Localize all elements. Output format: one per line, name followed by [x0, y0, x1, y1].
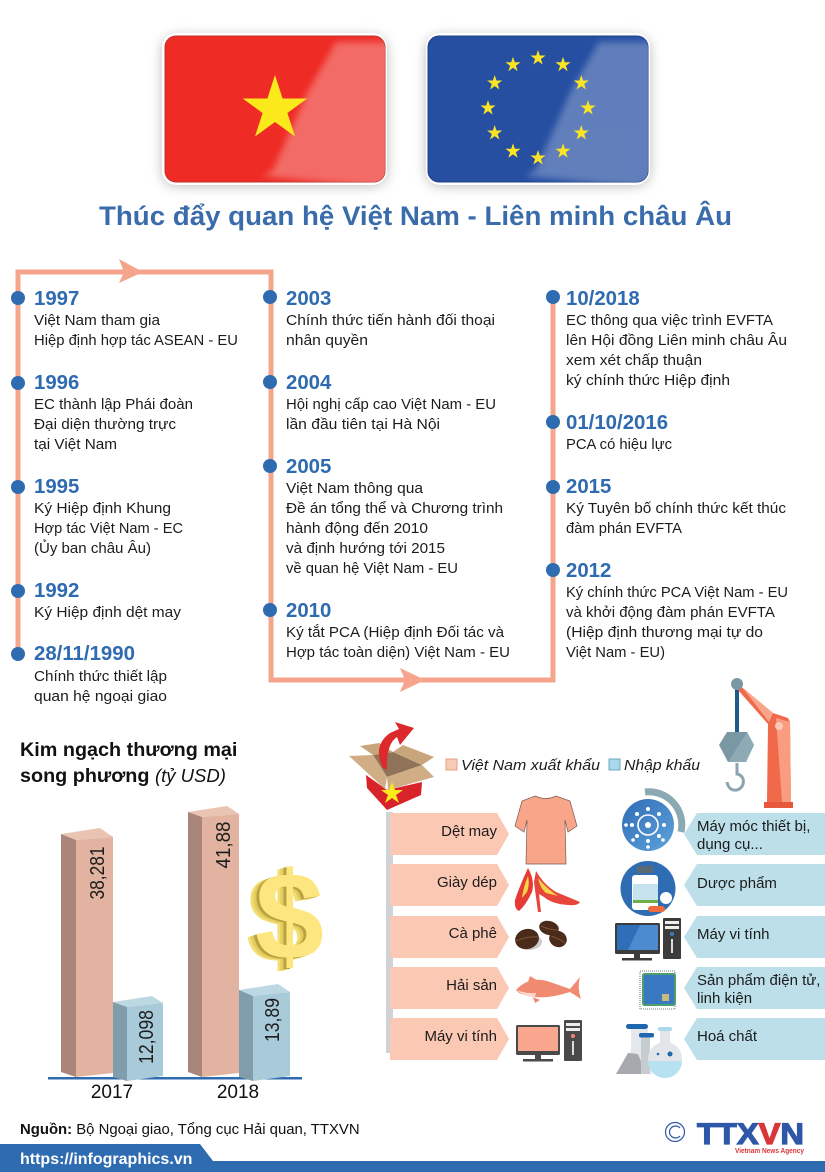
event: 28/11/1990: [34, 643, 167, 705]
icon: computer (imports): [615, 918, 681, 960]
exports: Cà phê: [390, 916, 509, 958]
event: 2010: 2010: [286, 600, 331, 622]
event: 2005: Việt Nam thông qua: [286, 480, 424, 497]
event: 1997: Hiệp định hợp tác ASEAN - EU: [34, 332, 238, 349]
event: 2012: [566, 560, 788, 661]
imports: Máy vi tính: Máy vi tính: [697, 926, 770, 943]
axis: [48, 1077, 302, 1080]
imports: Dược phẩm: [684, 864, 825, 906]
event: 2012: Việt Nam - EU): [566, 644, 665, 661]
icon: dollar sign: $: [246, 851, 315, 989]
bar: 2018 exports: 41,88: [213, 822, 235, 868]
year label 2017: 2017: [91, 1082, 133, 1103]
icon: high heels: [515, 868, 580, 912]
exports: Dệt may: Dệt may: [441, 823, 497, 840]
logo: TTXVN: TTXVN: [697, 1118, 804, 1151]
icon: chemistry flasks: [616, 1024, 682, 1078]
legend: Việt Nam xuất khẩu: [461, 757, 601, 774]
chart heading: song phương (tỷ USD): [20, 765, 226, 787]
event: 2004: Hội nghị cấp cao Việt Nam - EU: [286, 396, 496, 413]
bar: 2017 exports: 38,281: [87, 846, 109, 900]
exports: Máy vi tính: Máy vi tính: [424, 1028, 497, 1045]
event: 01/10/2016: [566, 412, 672, 453]
event: 2003: Chính thức tiến hành đối thoại: [286, 312, 495, 329]
event: 2015: 2015: [566, 476, 611, 498]
event: 2015: [566, 476, 787, 537]
flag: Vietnam: [162, 33, 400, 190]
exports: Hải sản: [390, 967, 509, 1009]
event: 10/2018: EC thông qua việc trình EVFTA: [566, 312, 773, 329]
footer bar with url: https://infographics.vn: [20, 1151, 192, 1168]
event: 2010: [286, 600, 510, 661]
icon: crane: [719, 678, 793, 808]
event: 2003: 2003: [286, 288, 331, 310]
timeline path with arrows: [18, 259, 553, 692]
bar: 2018 exports: [188, 806, 239, 1077]
event: 2012: (Hiệp định thương mại tự do: [566, 624, 763, 641]
event: 2012: và khởi động đàm phán EVFTA: [566, 604, 775, 621]
event: 2004: [286, 372, 496, 433]
event: 2003: [286, 288, 495, 349]
event: 1997: Việt Nam tham gia: [34, 312, 161, 329]
event: 1996: EC thành lập Phái đoàn: [34, 396, 193, 413]
source note: Nguồn: Bộ Ngoại giao, Tổng cục Hải quan, TTXVN: [20, 1122, 360, 1138]
event: 28/11/1990: 28/11/1990: [34, 643, 135, 665]
bar chart: [48, 806, 302, 1103]
event: 10/2018: [566, 288, 787, 389]
title: Thúc đẩy quan hệ Việt Nam - Liên minh châu Âu: [99, 200, 732, 231]
imports: Máy móc thiết bị, dụng cụ...: dụng cụ...: [697, 836, 763, 853]
event: 1995: Ký Hiệp định Khung: [34, 500, 171, 517]
event: 2005: [286, 456, 503, 577]
imports: Sản phẩm điện tử, linh kiện: Sản phẩm điện tử,: [697, 972, 820, 989]
event: 2004: lần đầu tiên tại Hà Nội: [286, 416, 440, 433]
icon: computer (exports): [516, 1020, 582, 1062]
exports: Dệt may: [390, 813, 509, 855]
bar: 2017 imports: [113, 996, 163, 1081]
legend: Nhập khẩu: [624, 757, 701, 774]
icon: dollar sign: $: [255, 848, 324, 986]
event: 2005: hành động đến 2010: [286, 520, 428, 537]
icon: box with flag star and arrow: [349, 722, 434, 810]
icon: dollar sign: $: [252, 849, 321, 987]
imports: Dược phẩm: Dược phẩm: [697, 875, 777, 892]
imports: Máy vi tính: [684, 916, 825, 958]
flag: European Union: [426, 33, 663, 190]
imports: Hoá chất: Hoá chất: [697, 1028, 758, 1045]
event: 2012: 2012: [566, 560, 611, 582]
imports: Hoá chất: [684, 1018, 825, 1060]
event: 1995: [34, 476, 183, 557]
exports: Cà phê: Cà phê: [449, 925, 497, 942]
icon: medicine bottle: [620, 861, 676, 916]
event: 1995: Hợp tác Việt Nam - EC: [34, 520, 183, 537]
event: 10/2018: ký chính thức Hiệp định: [566, 372, 730, 389]
export spine: [386, 812, 393, 1053]
exports: Hải sản: Hải sản: [446, 977, 497, 994]
event: 10/2018: lên Hội đồng Liên minh châu Âu: [566, 332, 787, 349]
exports: Máy vi tính: [390, 1018, 509, 1060]
imports: Máy móc thiết bị, dụng cụ...: [684, 813, 825, 855]
event: 2005: 2005: [286, 456, 331, 478]
logo: TTXVN: [666, 1118, 805, 1155]
event: 1996: tại Việt Nam: [34, 436, 117, 453]
event: 01/10/2016: 01/10/2016: [566, 412, 668, 434]
logo: TTXVN: Vietnam News Agency: [735, 1146, 805, 1155]
exports: Giày dép: Giày dép: [437, 874, 497, 891]
timeline dots: [11, 290, 560, 661]
event: 28/11/1990: Chính thức thiết lập: [34, 668, 167, 685]
event: 1992: Ký Hiệp định dệt may: [34, 604, 182, 621]
chart heading: [20, 739, 237, 787]
imports: Sản phẩm điện tử, linh kiện: linh kiện: [697, 990, 752, 1007]
event: 28/11/1990: quan hệ ngoại giao: [34, 688, 167, 705]
chart heading: Kim ngạch thương mại: [20, 739, 237, 761]
legend: [446, 757, 701, 774]
exports: Giày dép: [390, 864, 509, 906]
event: 1992: 1992: [34, 580, 79, 602]
event: 1997: 1997: [34, 288, 79, 310]
bar: 2017 exports: [61, 828, 113, 1077]
event: 1995: 1995: [34, 476, 79, 498]
event: 2010: Ký tắt PCA (Hiệp định Đối tác và: [286, 624, 505, 641]
event: 1996: [34, 372, 193, 453]
icon: dollar sign: $: [249, 850, 318, 988]
event: 1996: Đại diện thường trực: [34, 416, 176, 433]
event: 2015: đàm phán EVFTA: [566, 520, 682, 537]
bar: 2017 imports: 12,098: [136, 1010, 158, 1064]
event: 2004: 2004: [286, 372, 332, 394]
event: 1996: 1996: [34, 372, 79, 394]
event: 01/10/2016: PCA có hiệu lực: [566, 436, 672, 453]
year label 2018: 2018: [217, 1082, 259, 1103]
event: 1992: [34, 580, 182, 621]
imports: Sản phẩm điện tử, linh kiện: [684, 967, 825, 1009]
event: 2005: về quan hệ Việt Nam - EU: [286, 560, 458, 577]
event: 2005: Đề án tổng thể và Chương trình: [286, 500, 503, 517]
bar: 2018 imports: 13,89: [262, 998, 284, 1042]
event: 2010: Hợp tác toàn diện) Việt Nam - EU: [286, 644, 510, 661]
icon: t-shirt: [515, 796, 577, 864]
icon: microchip: [640, 971, 675, 1009]
icon: machine gear: [622, 792, 682, 851]
footer bar with url: [0, 1144, 825, 1172]
event: 2005: và định hướng tới 2015: [286, 540, 445, 557]
event: 10/2018: 10/2018: [566, 288, 640, 310]
event: 1995: (Ủy ban châu Âu): [34, 539, 151, 557]
imports: Máy móc thiết bị, dụng cụ...: Máy móc thiết bị,: [697, 818, 810, 835]
event: 2003: nhân quyền: [286, 332, 368, 349]
event: 10/2018: xem xét chấp thuận: [566, 352, 702, 369]
bar: 2018 imports: [239, 984, 290, 1081]
icon: coffee beans: [513, 919, 570, 952]
event: 1997: [34, 288, 238, 349]
event: 2012: Ký chính thức PCA Việt Nam - EU: [566, 584, 788, 601]
icon: fish: [516, 976, 581, 1003]
event: 2015: Ký Tuyên bố chính thức kết thúc: [566, 500, 787, 517]
